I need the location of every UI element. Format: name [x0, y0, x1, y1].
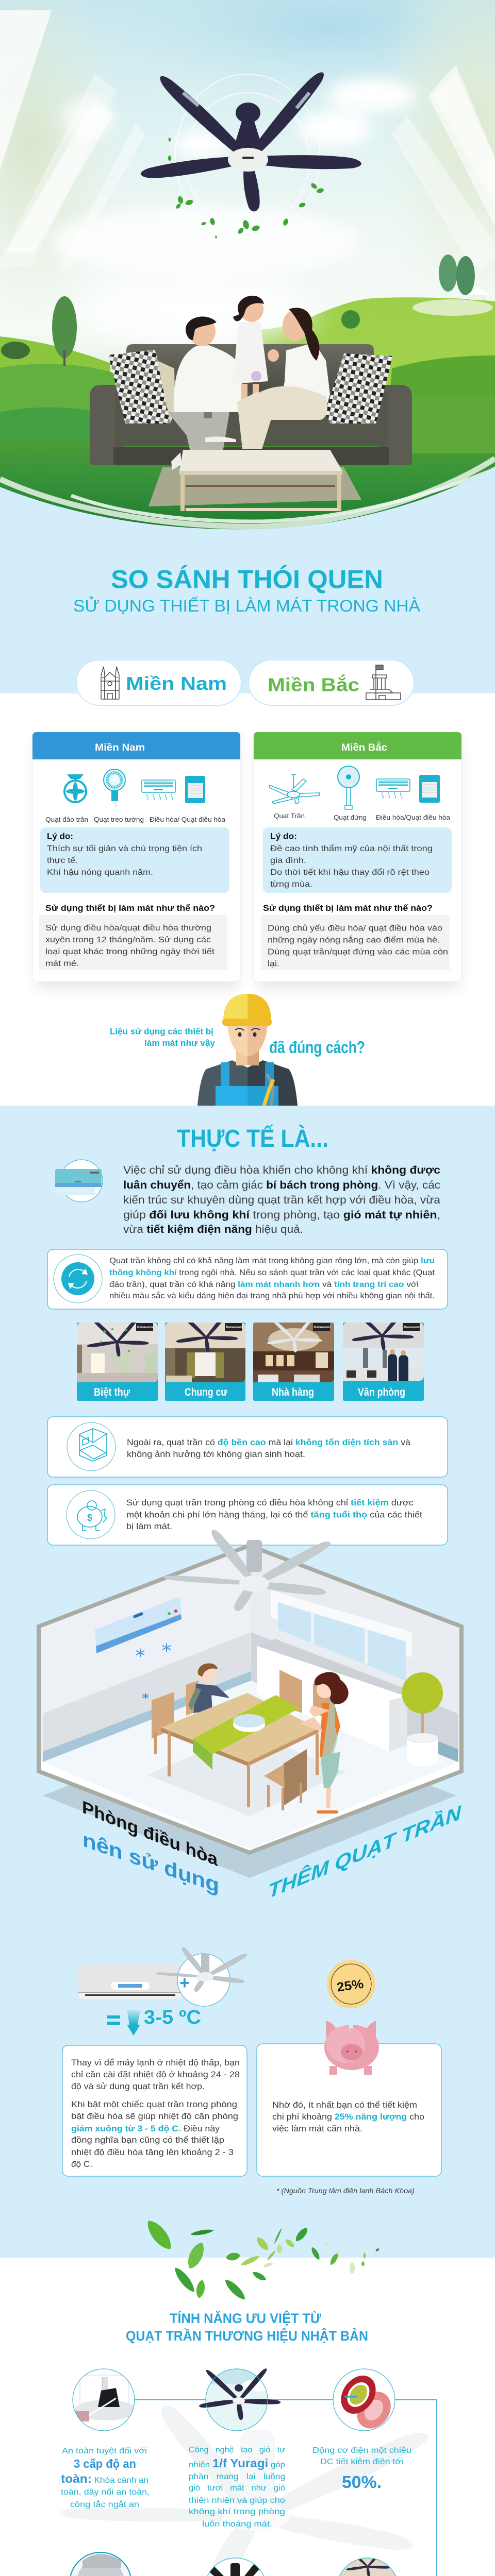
panel: temperature explanation: độ và sử dụng quạt trần kết hợp. — [71, 2082, 205, 2091]
ghost fan backdrop — [60, 2398, 434, 2576]
panel: savings explanation: chi phí khoảng 25% năng lượng cho — [272, 2112, 424, 2122]
result: temperature drop: 3-5 ºC — [144, 2007, 201, 2028]
photo card: Chung cư: Chung cư — [185, 1386, 228, 1398]
icon: air conditioner — [55, 1160, 103, 1202]
reason box: Lý do: — [270, 832, 297, 841]
paragraph — [123, 1164, 440, 1235]
panel: savings explanation — [257, 2044, 441, 2176]
device labels: Quạt đảo trần — [45, 816, 88, 823]
question text left: Liệu sử dụng các thiết bị — [110, 1026, 213, 1037]
text: luôn thoáng mát. — [202, 2520, 272, 2529]
panel: temperature explanation: nhiệt độ điều hòa tăng lên khoảng 2 - 3 — [71, 2148, 234, 2157]
text: đảo trần), quạt trần có khả năng làm mát nhanh hơn và tính trang trí cao với — [109, 1280, 419, 1289]
icon: ceiling fan — [269, 774, 320, 804]
text: An toàn tuyệt đối với — [62, 2447, 147, 2455]
feature: DC motor — [312, 2369, 411, 2492]
text: thông không khí trong ngôi nhà. Nếu so sánh quạt trần với các loại quạt khác (Quạt — [109, 1268, 435, 1277]
device labels — [274, 812, 451, 821]
usage box: lại. — [268, 959, 279, 969]
icon: standing fan — [338, 766, 359, 809]
panel: Miền Nam card: Miền Nam — [95, 742, 145, 753]
reason box: Thích sự tối giản và chú trọng tiện ích — [47, 844, 202, 853]
text: nhiều màu sắc và kiểu dáng hiện đại trang nhã phù hợp với nhiều không gian nội thất. — [109, 1291, 435, 1300]
text — [126, 1498, 422, 1531]
photo card: Biệt thự: Biệt thự — [94, 1386, 130, 1398]
question text left — [110, 1026, 216, 1048]
title: SỬ DỤNG THIẾT BỊ LÀM MÁT TRONG NHÀ — [73, 597, 421, 615]
piggy bank — [324, 2021, 379, 2075]
connector line — [47, 2400, 437, 2576]
panel: savings: $ — [87, 1513, 92, 1523]
reason box: Lý do: — [47, 832, 73, 841]
usage heading: Sử dụng thiết bị làm mát như thế nào? — [263, 903, 433, 913]
device labels — [45, 816, 226, 823]
panel: temperature explanation: độ C. — [71, 2160, 92, 2169]
device labels: Điều hòa/Quạt điều hòa — [376, 814, 451, 821]
device labels: Quạt đứng — [334, 814, 367, 821]
panel: savings — [47, 1485, 448, 1545]
panel: temperature explanation: chỉ cần cài đặt nhiệt độ ở khoảng 24 - 28 — [71, 2070, 240, 2079]
icon: air conditioner — [376, 779, 410, 799]
panel: air circulation — [47, 1249, 448, 1309]
coin 25% — [327, 1960, 375, 2008]
text — [189, 2446, 285, 2529]
panel: temperature explanation: Khi bật một chiếc quạt trần trong phòng — [71, 2100, 237, 2109]
photo card: Chung cư: Panasonic — [226, 1326, 243, 1329]
feature: short rod — [339, 2557, 396, 2576]
device labels: Quạt treo tường — [94, 816, 144, 823]
feature: Econavi sensor — [70, 2551, 131, 2576]
photo card: Nhà hàng — [253, 1317, 334, 1401]
reason box — [40, 827, 229, 893]
features heading: QUẠT TRẦN THƯƠNG HIỆU NHẬT BẢN — [126, 2327, 368, 2344]
feature: safety — [61, 2369, 150, 2509]
feature: Yuragi natural wind — [189, 2367, 285, 2529]
usage box — [39, 915, 227, 970]
features heading: TÍNH NĂNG ƯU VIỆT TỪ — [170, 2310, 322, 2326]
panel: temperature explanation: đồng nghĩa bạn cũng có thể thiết lập — [71, 2136, 224, 2145]
question text left: làm mát như vậy — [144, 1038, 216, 1048]
text: không ảnh hưởng tới không gian sinh hoạt. — [127, 1450, 305, 1459]
air conditioner plus fan graphic — [78, 1945, 249, 2006]
reason box: từng mùa. — [270, 880, 312, 889]
text: DC tiết kiệm điện tới — [320, 2458, 403, 2466]
text: gió tươi mát như gió — [189, 2484, 285, 2493]
image: safety mechanism — [73, 2369, 137, 2431]
device labels: Quạt Trần — [274, 812, 305, 820]
text: thiên nhiên và giúp cho — [189, 2496, 285, 2505]
flying leaves — [143, 2216, 380, 2302]
title — [73, 565, 421, 615]
icon: room plan — [67, 1422, 116, 1471]
reason box: thực tế. — [47, 856, 78, 865]
worker illustration — [197, 994, 298, 1106]
hero illustration: family under a ceiling fan — [0, 0, 495, 533]
green leaves swirling — [168, 138, 324, 239]
text: 50%. — [342, 2472, 382, 2492]
text: nhiên 1/f Yuragi góp — [189, 2456, 285, 2470]
question text right: đã đúng cách? — [269, 1038, 365, 1057]
usage box: những ngày nóng nắng cao điểm mùa hè. — [268, 935, 440, 945]
reason box: gia đình. — [270, 856, 306, 865]
icon: orbit fan — [64, 774, 86, 802]
icon: air conditioner — [142, 780, 175, 800]
icon: cathedral — [101, 667, 119, 699]
image: motor diagram — [333, 2369, 398, 2435]
usage heading: Sử dụng thiết bị làm mát như thế nào? — [45, 903, 215, 913]
image: silver hub — [62, 2552, 131, 2576]
text: Công nghệ tạo gió tự — [189, 2446, 285, 2454]
text: Sử dụng quạt trần trong phòng có điều hòa không chỉ tiết kiệm được — [126, 1498, 414, 1507]
paragraph: luân chuyển , tạo cảm giác bí bách trong phòng . Vì vậy, các — [123, 1179, 440, 1191]
panel: durability — [47, 1417, 448, 1477]
heading: thực tế là: THỰC TẾ LÀ... — [177, 1125, 328, 1153]
coin 25%: 25% — [336, 1977, 365, 1995]
photo card: Văn phòng: Panasonic — [404, 1326, 421, 1329]
icon: wall fan — [104, 769, 125, 807]
icon: portable cooler — [185, 776, 205, 803]
icon: portable cooler — [419, 775, 440, 803]
paragraph: kiến trúc sư khuyên dùng quạt trần kết hợp với điều hòa, vừa — [123, 1194, 440, 1206]
panel: savings explanation: Nhờ đó, ít nhất bạn có thể tiết kiệm — [272, 2100, 417, 2110]
text — [109, 1257, 435, 1300]
isometric room illustration — [39, 1527, 461, 1878]
text — [312, 2446, 411, 2492]
text — [127, 1438, 411, 1459]
reason box: Khí hậu nóng quanh năm. — [47, 868, 153, 877]
panel: Miền Bắc card — [254, 732, 461, 988]
region pill: Miền Bắc — [249, 660, 414, 705]
angled caption — [82, 1797, 461, 1903]
text: 3 cấp độ an — [74, 2457, 136, 2470]
photo card: Nhà hàng: Panasonic — [314, 1326, 331, 1329]
angled caption: nên sử dụng — [82, 1827, 219, 1897]
photo card: Biệt thự — [77, 1317, 158, 1401]
intro: air conditioner icon and paragraph — [55, 1160, 440, 1235]
panel: savings explanation: việc làm mát căn nhà. — [272, 2124, 362, 2133]
source note: * (Nguồn Trung tâm điện lạnh Bách Khoa) — [276, 2187, 415, 2195]
title: SO SÁNH THÓI QUEN — [111, 565, 383, 594]
paragraph: Việc chỉ sử dụng điều hòa khiến cho không khí không được — [123, 1164, 440, 1176]
result: temperature drop — [107, 2007, 201, 2036]
region pill: Miền Bắc: Miền Bắc — [268, 674, 359, 696]
panel: temperature explanation: Thay vì để máy lạnh ở nhiệt độ thấp, bạn — [71, 2058, 240, 2067]
panel: temperature explanation — [62, 2045, 247, 2176]
paragraph: giúp đối lưu không khí trong phòng, tạo gió mát tự nhiên , — [123, 1209, 440, 1221]
photo card: Chung cư — [165, 1323, 245, 1401]
feature: designs and colours — [207, 2557, 264, 2576]
hero fan — [140, 69, 362, 212]
usage box — [261, 915, 450, 970]
text: không khí trong phòng — [189, 2507, 285, 2516]
usage box: Sử dụng điều hòa/quạt điều hòa thường — [45, 924, 211, 933]
reason box — [263, 827, 452, 893]
reason box: Đề cao tính thẩm mỹ của nội thất trong — [270, 844, 433, 853]
text: Ngoài ra, quạt trần có độ bền cao mà lại không tốn diện tích sàn và — [127, 1438, 411, 1447]
text: bị làm mát. — [126, 1522, 172, 1531]
usage box: mát mẻ. — [45, 959, 79, 968]
text: Quạt trần không chỉ có khả năng làm mát trong không gian rộng lớn, mà còn giúp lưu — [109, 1257, 435, 1265]
photo card: Văn phòng: Văn phòng — [358, 1386, 405, 1398]
image: fan in sky — [199, 2367, 281, 2431]
reason box: Do thời tiết khí hậu thay đổi rõ rệt theo — [270, 868, 430, 877]
icon: circulation arrows — [54, 1255, 102, 1303]
text: Động cơ điện một chiều — [312, 2446, 411, 2455]
photo card: Biệt thự: Panasonic — [137, 1326, 154, 1329]
panel: temperature explanation: giảm xuống từ 3 - 5 độ C . Điều này — [71, 2124, 220, 2133]
text — [61, 2447, 150, 2509]
region pill: Miền Nam — [76, 660, 241, 705]
panel: temperature explanation: bật điều hòa sẽ giúp nhiệt độ căn phòng — [71, 2112, 238, 2121]
image: living room — [339, 2557, 396, 2576]
image: black fan with gold hub — [207, 2557, 264, 2576]
features heading — [126, 2310, 368, 2344]
text: công tắc ngắt an — [70, 2499, 139, 2509]
usage box: Dùng chủ yếu điều hòa/ quạt điều hòa vào — [268, 924, 442, 933]
device labels: Điều hòa/ Quạt điều hòa — [150, 816, 226, 823]
usage box: loại quạt khác trong những ngày thời tiết — [45, 947, 215, 956]
panel: Miền Nam card — [32, 732, 240, 988]
usage box: Dùng quạt trần/quạt đứng vào các mùa còn — [268, 948, 448, 956]
paragraph: vừa tiết kiệm điện năng hiệu quả. — [123, 1224, 303, 1235]
angled caption: Phòng điều hòa — [82, 1797, 218, 1870]
region pill: Miền Nam: Miền Nam — [126, 673, 227, 694]
angled caption: THÊM QUẠT TRẦN — [268, 1801, 461, 1903]
air conditioner plus fan graphic: + — [179, 1973, 190, 1993]
text: phần mang lại luồng — [189, 2472, 285, 2481]
text: toàn: Khóa cánh an — [61, 2472, 148, 2485]
photo card: Văn phòng — [343, 1323, 424, 1401]
text: toàn, dây nối an toàn, — [61, 2488, 150, 2497]
icon: piggy bank — [67, 1490, 115, 1539]
icon: mausoleum — [366, 665, 401, 700]
panel: Miền Bắc card: Miền Bắc — [341, 742, 387, 753]
usage box: xuyên trong 12 tháng/năm. Sử dụng các — [45, 936, 211, 944]
text: một khoản chi phí lớn hàng tháng, lại có thể tăng tuổi thọ của các thiết — [126, 1511, 422, 1520]
photo card: Nhà hàng: Nhà hàng — [272, 1386, 314, 1398]
